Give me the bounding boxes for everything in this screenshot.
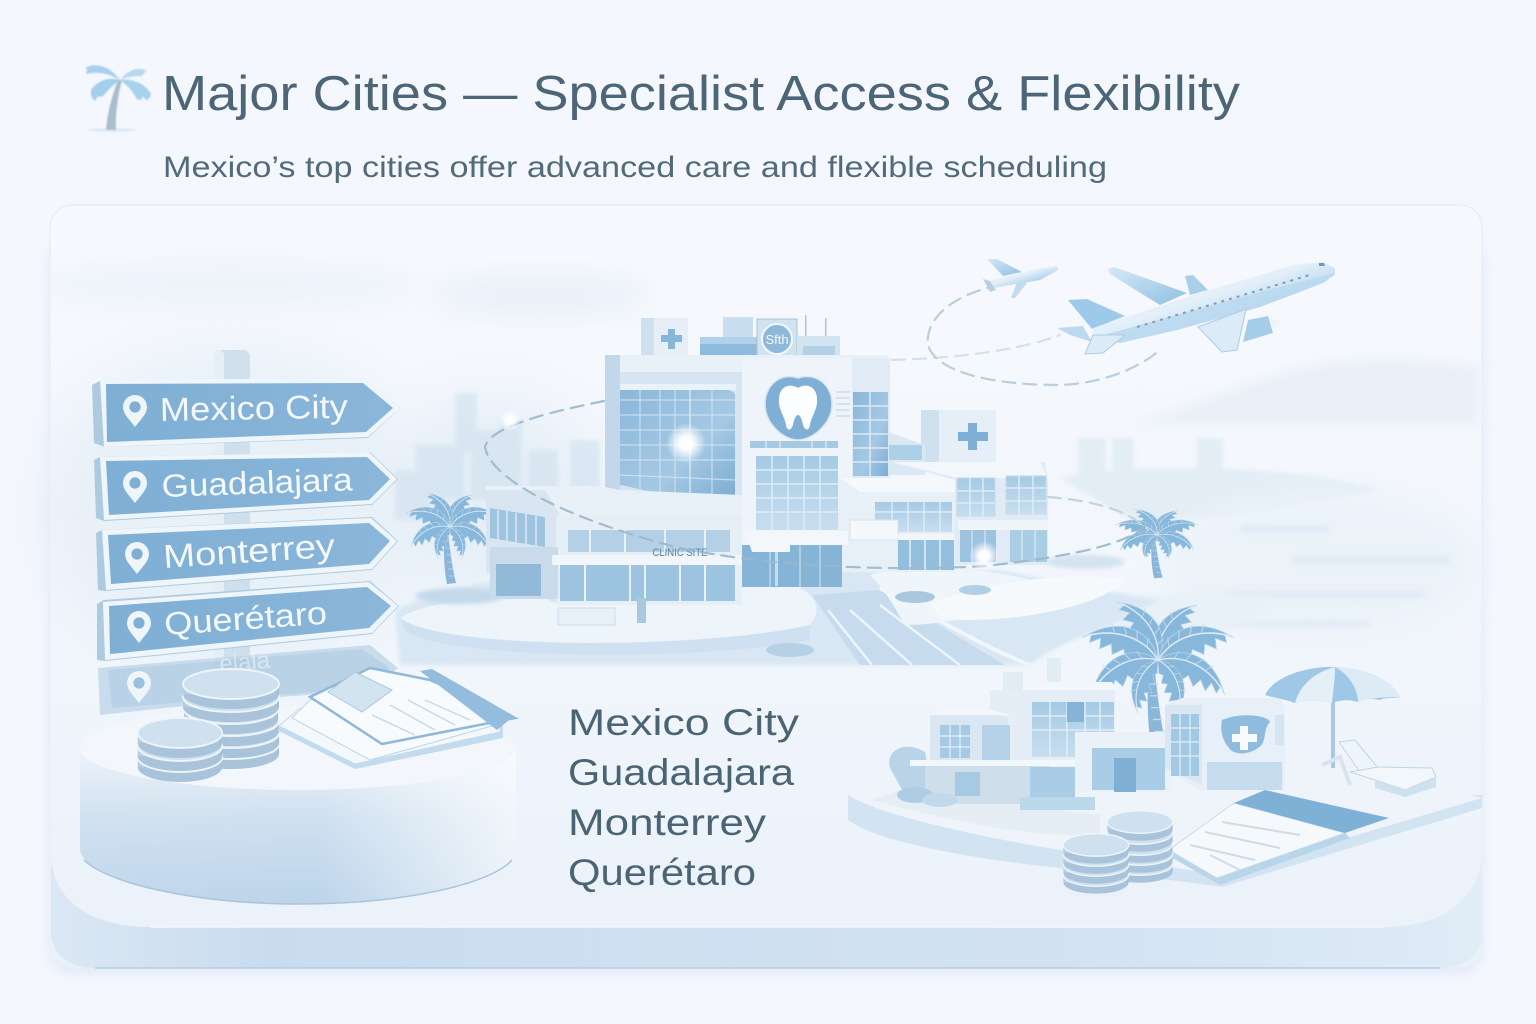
right cross block [888,410,996,475]
signpost [92,350,400,715]
sign: Querétaro: Querétaro [163,595,328,642]
beach umbrella [1265,667,1400,768]
icon: small airplane [983,259,1058,298]
curved glass facade [620,385,735,500]
sign: Mexico City: Mexico City [159,388,349,428]
sign: Monterrey [96,517,398,591]
palm: right of clinic [1114,504,1200,578]
list of cities: Guadalajara [568,752,794,793]
dental badge [765,376,832,440]
panel shadow [48,235,1484,975]
main tower [605,355,742,540]
planter boxes [558,608,615,625]
rooftop blocks [641,315,840,359]
distant city skyline [395,393,600,520]
island base [848,748,1482,887]
list of cities: Querétaro [568,852,756,893]
rooftop blocks: Sfth [765,332,789,347]
central glass facade [756,456,838,530]
sign: Guadalajara [94,452,398,521]
left wing [486,486,742,605]
icon: large airplane [1057,262,1335,354]
brochure on island [1169,790,1389,885]
podium cylinder [80,706,516,904]
sign: Querétaro [97,581,399,661]
mid wing [838,478,955,572]
sign: Mexico City [92,378,400,447]
right wing [890,462,1048,565]
palm: left of clinic [405,486,495,584]
subtitle: Mexico’s top cities offer advanced care and flexible scheduling [163,151,1107,184]
island building left [889,658,1173,810]
list of cities: Monterrey [568,802,767,843]
glow points on route [499,409,999,571]
sign: Monterrey: Monterrey [162,527,337,575]
sign: Guadalajara: Guadalajara [161,461,353,504]
coin stacks on podium [138,669,279,782]
left wing: CLINIC SITE [652,547,708,559]
coin stacks on island [1063,811,1173,894]
panel: main scene [40,205,1484,975]
clinic building complex [486,315,1048,625]
ghost sign reflection [98,645,398,715]
list of cities: Mexico City [568,702,800,743]
background: distant coast and sky [40,263,1480,670]
ground plaza and roads [395,555,1160,665]
post [214,350,250,690]
icon: palm tree [85,65,151,132]
dashed flight path around clinic [485,285,1160,568]
island building right with shield [1165,698,1285,790]
title: Major Cities — Specialist Access & Flexibility [162,67,1241,121]
palm: island [1081,590,1235,757]
list of cities [568,702,800,893]
tray base lip [51,855,1482,968]
tickets and brochures on podium [277,668,515,769]
ghost sign reflection: elala [218,647,272,678]
beach lounger [1322,740,1436,797]
entry canopy [742,531,848,587]
side glass strip [853,392,888,476]
coastal clinic island [848,590,1482,894]
